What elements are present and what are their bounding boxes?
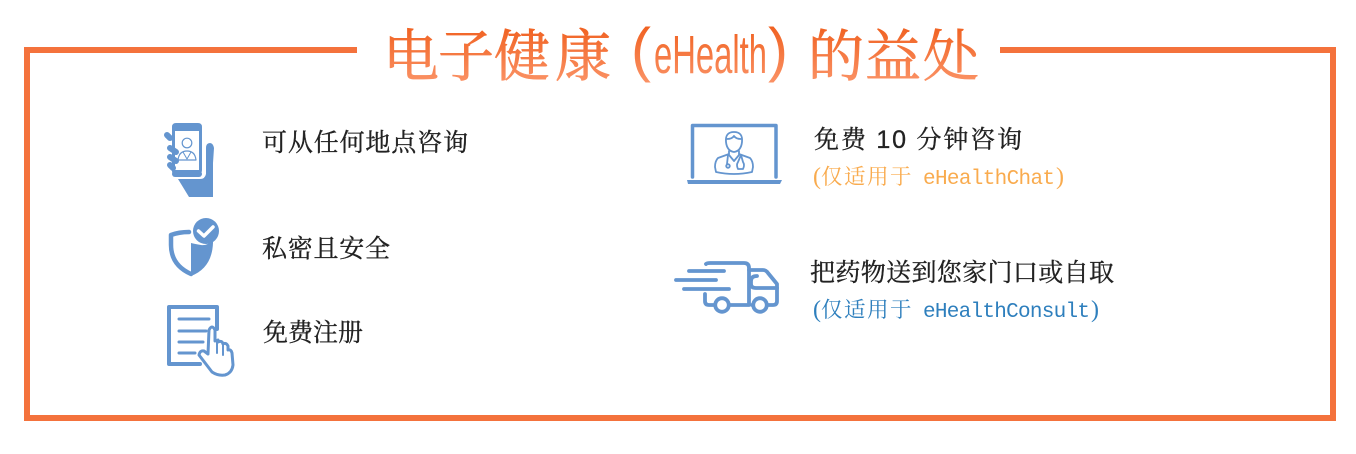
title: eHealth xyxy=(654,25,767,85)
note: eHealthConsult only: ) xyxy=(1091,297,1099,323)
note: eHealthChat only: eHealthChat xyxy=(923,168,1055,191)
note: eHealthConsult only: eHealthConsult xyxy=(923,301,1090,324)
note: eHealthConsult only: ( xyxy=(813,297,821,323)
title: 电子健康 xyxy=(383,25,611,88)
icon: phone in hand with doctor xyxy=(167,123,214,197)
icon: delivery truck xyxy=(676,263,777,312)
label: private and secure: 私密且安全 xyxy=(262,235,390,263)
label: free registration: 免费注册 xyxy=(263,319,363,347)
label: consult anywhere: 可从任何地点咨询 xyxy=(262,129,468,157)
label: delivery or pickup: 把药物送到您家门口或自取 xyxy=(810,259,1114,287)
note: eHealthConsult only: 仅适用于 xyxy=(821,298,912,322)
title xyxy=(383,16,979,88)
title: ( xyxy=(631,16,651,83)
title: ) xyxy=(768,16,788,83)
note: eHealthChat only: ) xyxy=(1056,164,1064,190)
title: 的益处 xyxy=(808,25,979,88)
note: eHealthChat only: 仅适用于 xyxy=(821,165,912,189)
icon: shield with check xyxy=(171,218,219,276)
note: eHealthChat only: ( xyxy=(813,164,821,190)
label: free 10-minute consultation: 免费 10 分钟咨询 xyxy=(814,126,1022,154)
icon: document with pointing hand xyxy=(169,307,233,375)
panel frame xyxy=(27,50,1333,418)
icon: laptop with doctor xyxy=(687,126,782,184)
